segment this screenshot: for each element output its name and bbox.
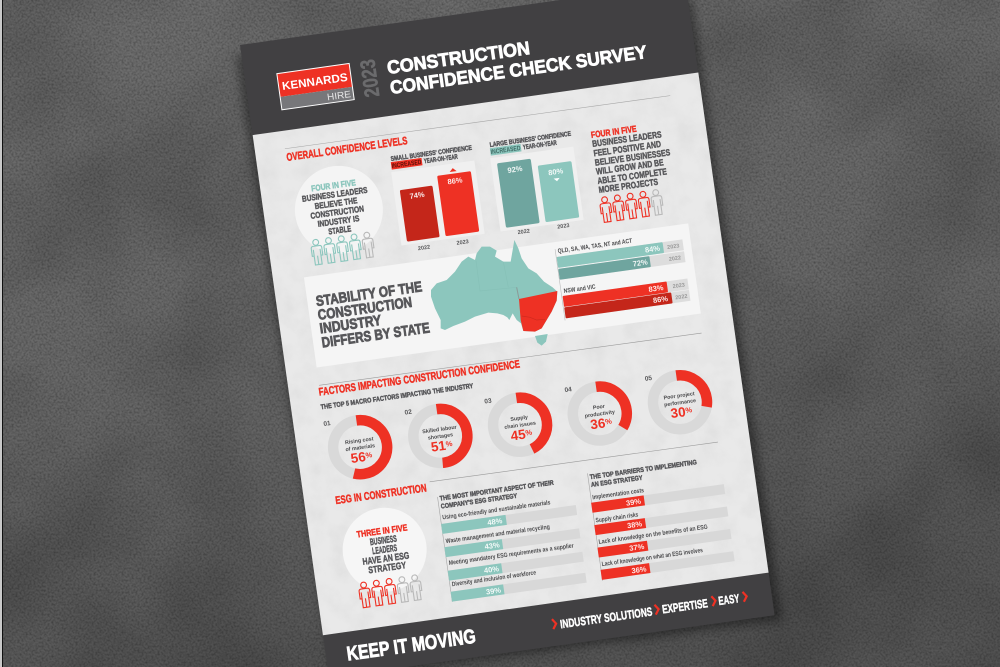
icons: four in five people teal: [310, 232, 375, 265]
bar chart: most important ESG aspect: 39%: [485, 585, 502, 597]
callout: four in five stable: CONSTRUCTION: [310, 203, 365, 221]
chart: small business confidence: YEAR-ON-YEAR: [424, 154, 458, 165]
chart: small business confidence: SMALL BUSINESS' CONFIDENCE: [390, 145, 473, 163]
bar chart: state stability: 2022: [675, 294, 688, 301]
donut 03: supply chain issues: Supply: [510, 415, 528, 423]
chart: small business confidence: 74%: [409, 190, 426, 201]
bar chart: top barriers to ESG: 39%: [625, 497, 642, 508]
callout: three in five have an ESG strategy: STRATEGY: [368, 560, 407, 576]
bar chart: state stability: 83%: [648, 283, 664, 294]
heading: stability differs by state: DIFFERS BY STATE: [321, 320, 431, 351]
donut 05: poor project performance: Poor project: [663, 391, 695, 401]
bar chart: top barriers to ESG: [587, 455, 735, 581]
bar chart: most important ESG aspect: Meeting mandatory ESG requirements as a supplier: [448, 542, 575, 567]
bar chart: top barriers to ESG: 36%: [631, 564, 647, 575]
donut 03: supply chain issues: chain issues: [504, 421, 536, 431]
chart: small business confidence: [389, 145, 486, 254]
bar chart: state stability: QLD, SA, WA, TAS, NT and ACT: [557, 238, 633, 255]
bar chart: state stability: 86%: [652, 294, 669, 305]
bar chart: most important ESG aspect: THE MOST IMPORTANT ASPECT OF THEIR: [439, 480, 554, 503]
donut 01: rising cost of materials: of materials: [345, 443, 375, 453]
heading: overall confidence levels: OVERALL CONFIDENCE LEVELS: [286, 135, 408, 164]
title: CONFIDENCE CHECK SURVEY: [389, 41, 649, 98]
chart: large business confidence: YEAR-ON-YEAR: [523, 140, 557, 151]
icons: four in five people red: [599, 189, 664, 223]
footer tagline: EXPERTISE: [661, 596, 709, 616]
footer band: [323, 573, 775, 667]
bar chart: top barriers to ESG: Supply chain risks: [595, 511, 639, 524]
bar chart: state stability: [555, 231, 691, 320]
bar chart: most important ESG aspect: Using eco-friendly and sustainable materials: [442, 499, 551, 521]
poster: [244, 14, 773, 667]
donut 04: poor productivity: [564, 379, 630, 445]
bar chart: most important ESG aspect: [437, 477, 587, 602]
bar chart: state stability: 84%: [644, 244, 661, 255]
donut 03: supply chain issues: 03: [484, 397, 492, 405]
heading: ESG in construction: ESG IN CONSTRUCTION: [335, 482, 427, 507]
logo: Kennards Hire: [276, 63, 355, 110]
subheading: top 5 macro factors: THE TOP 5 MACRO FACTORS IMPACTING THE INDUSTRY: [320, 383, 474, 411]
donut 04: poor productivity: 04: [564, 386, 573, 394]
chart: small business confidence: INCREASED: [391, 159, 422, 170]
callout: three in five have an ESG strategy: LEADERS: [372, 543, 398, 557]
donut 02: skilled labour shortages: 02: [404, 409, 413, 417]
bar chart: state stability: 2023: [667, 243, 680, 251]
bar chart: top barriers to ESG: THE TOP BARRIERS TO IMPLEMENTING: [589, 459, 697, 481]
bar chart: state stability: NSW and VIC: [563, 284, 596, 295]
donut 05: poor project performance: %: [685, 405, 693, 415]
text block: four in five feel positive: ABLE TO COMPLETE: [597, 166, 667, 186]
heading: stability differs by state: INDUSTRY: [319, 313, 383, 337]
chart: large business confidence: INCREASED: [490, 145, 521, 156]
bar chart: most important ESG aspect: 43%: [484, 540, 501, 551]
footer tagline: [552, 590, 748, 632]
chart: large business confidence: 80%: [548, 166, 564, 177]
text block: four in five feel positive: FOUR IN FIVE: [590, 124, 637, 140]
callout: three in five have an ESG strategy: HAVE AN ESG: [362, 550, 410, 568]
map of Australia: [431, 240, 557, 346]
chart: large business confidence: 2022: [517, 228, 530, 236]
bar chart: top barriers to ESG: 37%: [629, 542, 645, 553]
donut 02: skilled labour shortages: %: [445, 439, 453, 449]
callout: four in five stable: INDUSTRY IS: [317, 213, 360, 229]
bar chart: most important ESG aspect: 48%: [487, 516, 503, 527]
bar chart: top barriers to ESG: Implementation costs: [592, 487, 645, 501]
footer tagline: EASY: [717, 591, 740, 608]
donut 05: poor project performance: [644, 368, 710, 433]
header band: [240, 0, 698, 135]
donut 04: poor productivity: Poor: [593, 404, 605, 411]
footer tagline: INDUSTRY SOLUTIONS: [559, 605, 653, 631]
callout: four in five stable: [289, 160, 389, 260]
donut 03: supply chain issues: 45: [510, 427, 527, 444]
callout: three in five have an ESG strategy: THREE IN FIVE: [356, 522, 408, 539]
logo: Kennards Hire: HIRE: [326, 89, 352, 103]
donut 04: poor productivity: %: [605, 416, 613, 426]
callout: four in five stable: STABLE: [328, 223, 352, 236]
chart: large business confidence: LARGE BUSINESS' CONFIDENCE: [489, 131, 572, 149]
text block: four in five feel positive: WILL GROW AND BE: [595, 157, 664, 177]
bar chart: top barriers to ESG: Lack of knowledge on the benefits of an ESG: [598, 524, 708, 546]
chart: small business confidence: 86%: [447, 175, 463, 186]
donut 02: skilled labour shortages: [404, 401, 471, 467]
year: 2023: [356, 58, 384, 99]
callout: four in five stable: FOUR IN FIVE: [310, 177, 357, 193]
bar chart: top barriers to ESG: Lack of knowledge on what an ESG involves: [601, 547, 704, 568]
bar chart: most important ESG aspect: COMPANY'S ESG STRATEGY: [440, 493, 518, 510]
callout: three in five have an ESG strategy: [337, 502, 432, 597]
bar chart: state stability: 72%: [632, 257, 649, 268]
bar chart: most important ESG aspect: Diversity and inclusion of workforce: [451, 569, 537, 588]
donut 02: skilled labour shortages: Skilled labour: [422, 425, 457, 435]
donut 03: supply chain issues: [484, 390, 551, 456]
heading: stability differs by state: STABILITY OF THE: [315, 279, 423, 310]
donut 01: rising cost of materials: [323, 413, 391, 479]
footer slogan: KEEP IT MOVING: [345, 626, 477, 666]
donut 05: poor project performance: 30: [670, 404, 687, 421]
heading: stability differs by state: [315, 279, 431, 351]
bar chart: most important ESG aspect: 40%: [483, 564, 500, 575]
panel: stability by state: [304, 223, 701, 367]
bar chart: state stability: 2022: [669, 255, 682, 263]
heading: stability differs by state: CONSTRUCTION: [317, 295, 413, 324]
title: CONSTRUCTION: [386, 37, 531, 78]
donut 02: skilled labour shortages: 51: [430, 438, 447, 455]
donut 02: skilled labour shortages: shortages: [428, 432, 453, 442]
donut 04: poor productivity: 36: [589, 415, 606, 432]
text block: four in five feel positive: [590, 120, 675, 195]
text block: four in five feel positive: MORE PROJECTS: [598, 177, 659, 195]
donut 01: rising cost of materials: 56: [350, 449, 367, 466]
callout: four in five stable: BUSINESS LEADERS: [301, 185, 368, 204]
callout: four in five stable: BELIEVE THE: [314, 195, 358, 211]
donut 03: supply chain issues: %: [525, 428, 533, 438]
donut 01: rising cost of materials: %: [365, 450, 373, 460]
icons: three in five people: [358, 574, 423, 608]
text block: four in five feel positive: FEEL POSITIVE AND: [593, 139, 662, 158]
bar chart: top barriers to ESG: AN ESG STRATEGY: [591, 475, 643, 489]
poster shadow: [236, 0, 782, 667]
chart: small business confidence: 2022: [418, 245, 431, 252]
donut 01: rising cost of materials: Rising cost: [345, 436, 374, 446]
donut 05: poor project performance: 05: [644, 375, 653, 383]
chart: small business confidence: 2023: [456, 239, 469, 247]
bar chart: top barriers to ESG: 38%: [627, 519, 643, 530]
chart: large business confidence: 92%: [507, 164, 523, 175]
donut 04: poor productivity: productivity: [585, 409, 615, 420]
text block: four in five feel positive: BUSINESS LEADERS: [592, 129, 662, 149]
callout: three in five have an ESG strategy: BUSINESS: [369, 534, 398, 548]
bar chart: most important ESG aspect: Waste management and material recycling: [445, 524, 550, 545]
heading: factors impacting construction confidence: FACTORS IMPACTING CONSTRUCTION CONFIDENCE: [318, 359, 521, 399]
poster body: [253, 72, 769, 635]
donut 05: poor project performance: performance: [664, 398, 696, 408]
logo: Kennards Hire: KENNARDS: [281, 72, 349, 93]
chart: large business confidence: [488, 131, 585, 238]
text block: four in five feel positive: BELIEVE BUSINESSES: [594, 147, 671, 168]
chart: large business confidence: 2023: [557, 223, 570, 231]
donut 01: rising cost of materials: 01: [323, 420, 332, 428]
bar chart: state stability: 2023: [672, 282, 685, 290]
